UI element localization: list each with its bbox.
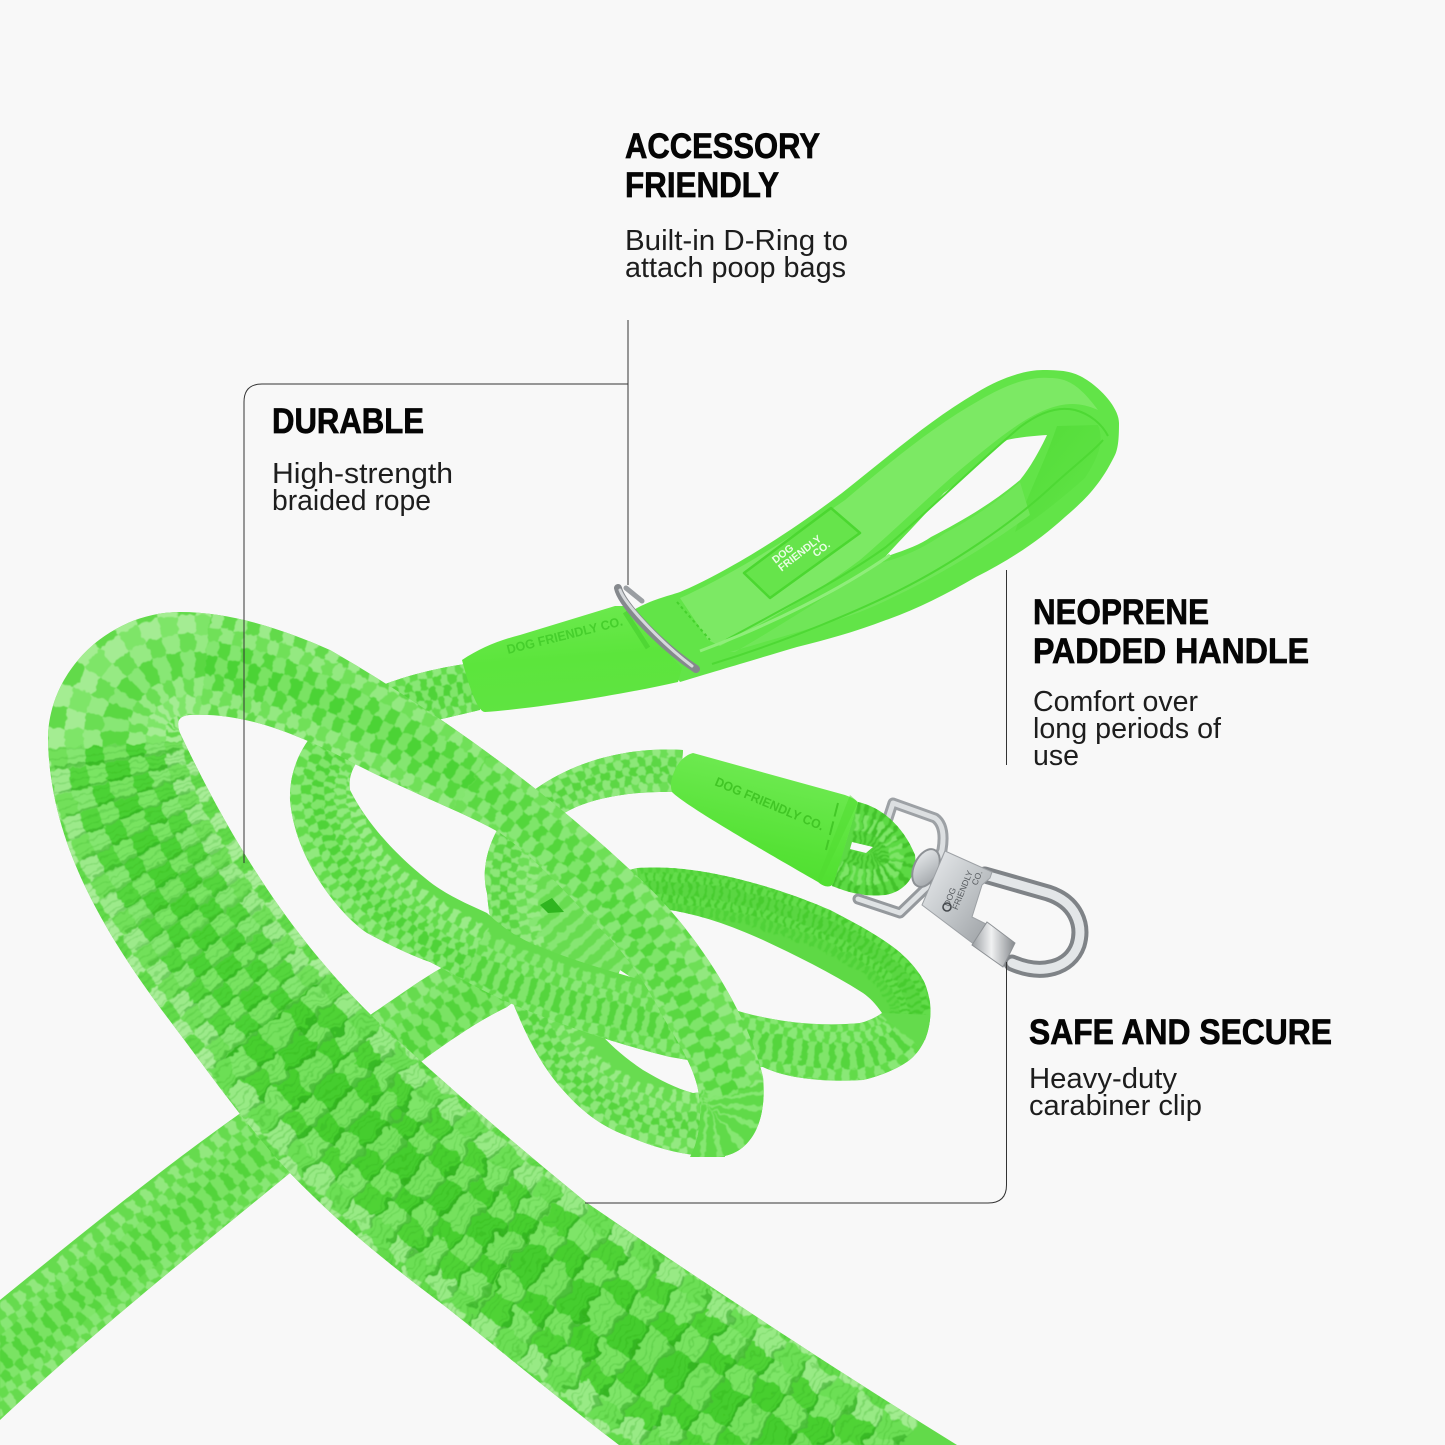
main thick rope: [40, 600, 1000, 1445]
metal D-ring: [618, 588, 696, 669]
rope gap shadow: [540, 898, 564, 913]
carabiner gate barrel: [972, 922, 1015, 967]
callout: durable: braided rope: [272, 485, 431, 517]
carabiner link: lower front bar: [858, 886, 928, 913]
main rope weave: descending section: [472, 782, 732, 1129]
short rope through carabiner link: [832, 802, 916, 896]
carabiner engraved logo: DOG: [942, 886, 958, 908]
main rope weave: left rising section: [115, 745, 270, 1020]
callout: durable: [272, 402, 453, 517]
leader line: neoprene handle: [1006, 570, 1008, 765]
callout: safe and secure: Heavy-duty: [1029, 1063, 1178, 1095]
handle upper padded strip: [680, 378, 1098, 646]
handle strap: [630, 370, 1119, 682]
callout: accessory friendly: [625, 127, 848, 284]
callout: accessory friendly: ACCESSORY: [625, 127, 820, 166]
main rope weave: top bend: [115, 664, 472, 782]
rope loop gap: [850, 842, 873, 853]
callout: accessory friendly: Built-in D-Ring to: [625, 225, 848, 257]
callout: durable: High-strength: [272, 458, 453, 490]
main rope weave: foreground section: [516, 1255, 860, 1445]
leader line: safe and secure: [585, 962, 1006, 1203]
callout: accessory friendly: FRIENDLY: [625, 166, 779, 205]
carabiner engraved logo: FRIENDLY: [950, 869, 975, 911]
rope: lower loop from clip cuff: [480, 745, 730, 1160]
callout: neoprene padded handle: Comfort over: [1033, 686, 1198, 718]
carabiner hook: [985, 875, 1080, 969]
carabiner clip: [907, 845, 1080, 969]
handle inner far side: [1015, 425, 1101, 532]
callout: accessory friendly: attach poop bags: [625, 252, 846, 284]
callout: neoprene padded handle: use: [1033, 740, 1079, 772]
callout: durable: DURABLE: [272, 402, 424, 441]
callout: neoprene padded handle: long periods of: [1033, 713, 1222, 745]
carabiner engraved logo: CO.: [970, 869, 984, 887]
main rope weave: lower-middle section: [270, 1020, 516, 1255]
handle logo patch: [744, 508, 860, 598]
leader line: accessory to D-ring and durable: [244, 320, 628, 863]
handle logo patch: FRIENDLY: [776, 533, 824, 574]
callout: neoprene padded handle: NEOPRENE: [1033, 593, 1209, 632]
rope: right loop upper section: [637, 868, 931, 1040]
callout: neoprene padded handle: [1033, 593, 1309, 772]
cuff engraved logo: DOG FRIENDLY CO.: [713, 774, 826, 833]
callout: safe and secure: carabiner clip: [1029, 1090, 1202, 1122]
handle logo patch: DOG: [770, 542, 796, 566]
carabiner link: upper back bar: [877, 803, 943, 878]
callout: safe and secure: SAFE AND SECURE: [1029, 1013, 1332, 1052]
callout: safe and secure: [1029, 1013, 1332, 1122]
rope tail running to lower left: [0, 868, 638, 1420]
callout: neoprene padded handle: PADDED HANDLE: [1033, 632, 1309, 671]
rope: front band across the loops: [285, 655, 935, 1085]
rubber cuff near handle: [462, 606, 682, 712]
handle lower padded strip: [730, 482, 1030, 652]
handle logo patch: CO.: [811, 539, 833, 560]
cuff engraved logo: DOG FRIENDLY CO.: [505, 614, 624, 657]
carabiner body plate: [922, 851, 992, 945]
carabiner swivel: [907, 845, 945, 891]
rubber cuff near clip: [671, 753, 858, 886]
